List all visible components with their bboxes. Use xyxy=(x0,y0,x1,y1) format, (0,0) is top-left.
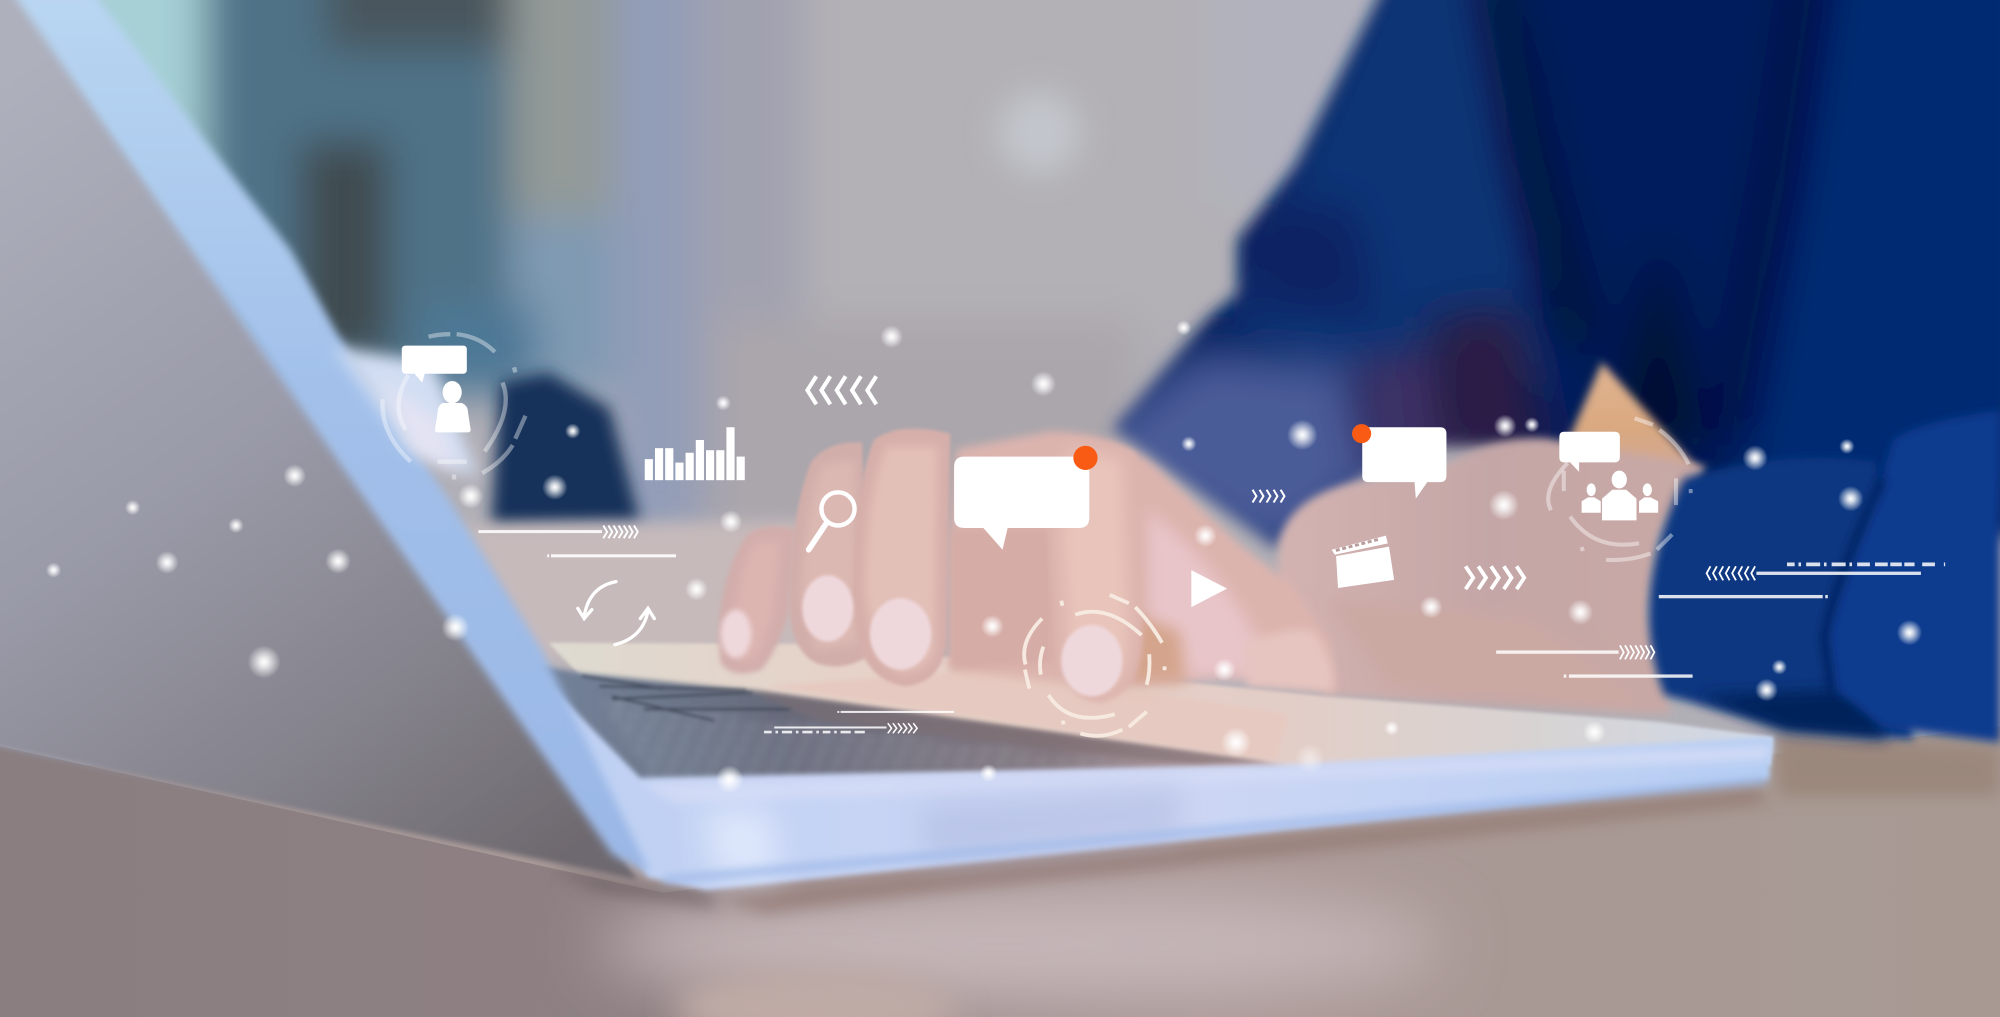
bar chart icon xyxy=(645,427,745,480)
middle finger xyxy=(853,429,950,686)
chevrons: left-pointing row xyxy=(807,376,876,404)
data lines: far right xyxy=(1659,562,1945,598)
table surface xyxy=(0,727,2000,1017)
finger nails xyxy=(721,575,1122,696)
data lines: lower right xyxy=(1496,645,1693,678)
right hand (blurred) xyxy=(1276,439,1707,714)
icon: play triangle xyxy=(1191,570,1227,607)
icon: user with speech bubble inside rings xyxy=(382,334,526,480)
left hand xyxy=(718,429,1335,703)
icon: refresh arrows xyxy=(578,582,654,645)
front lip xyxy=(500,663,1773,890)
laptop lid xyxy=(0,0,651,880)
blue sweater cuff xyxy=(1649,411,2000,742)
navy sweater sleeve xyxy=(1071,0,2000,561)
little finger xyxy=(718,526,796,673)
index finger xyxy=(1048,438,1143,703)
photo background: blurred office wall xyxy=(0,0,2000,765)
glowing bokeh particles xyxy=(46,320,1922,793)
data lines: upper left xyxy=(478,525,676,557)
ring finger xyxy=(790,442,867,666)
palm rest xyxy=(548,643,1773,773)
data lines: over keyboard xyxy=(764,711,954,733)
icon: group of people with speech bubble inside rings xyxy=(1548,418,1693,560)
icon: touch ripple rings around index fingertip xyxy=(1024,595,1166,736)
small right chevrons xyxy=(1253,490,1284,503)
laptop base with keyboard and trackpad xyxy=(500,643,1773,890)
icon: clapperboard xyxy=(1332,536,1394,588)
speech bubble with small orange dot xyxy=(1352,424,1446,499)
speech bubble with orange notification dot xyxy=(954,446,1098,550)
back of hand xyxy=(950,431,1335,691)
large right chevrons xyxy=(1466,566,1524,589)
icon: magnifying glass xyxy=(809,492,855,550)
trackpad highlight xyxy=(765,670,1288,760)
wrist skin wedge xyxy=(1554,362,1703,474)
keyboard xyxy=(510,661,1288,786)
